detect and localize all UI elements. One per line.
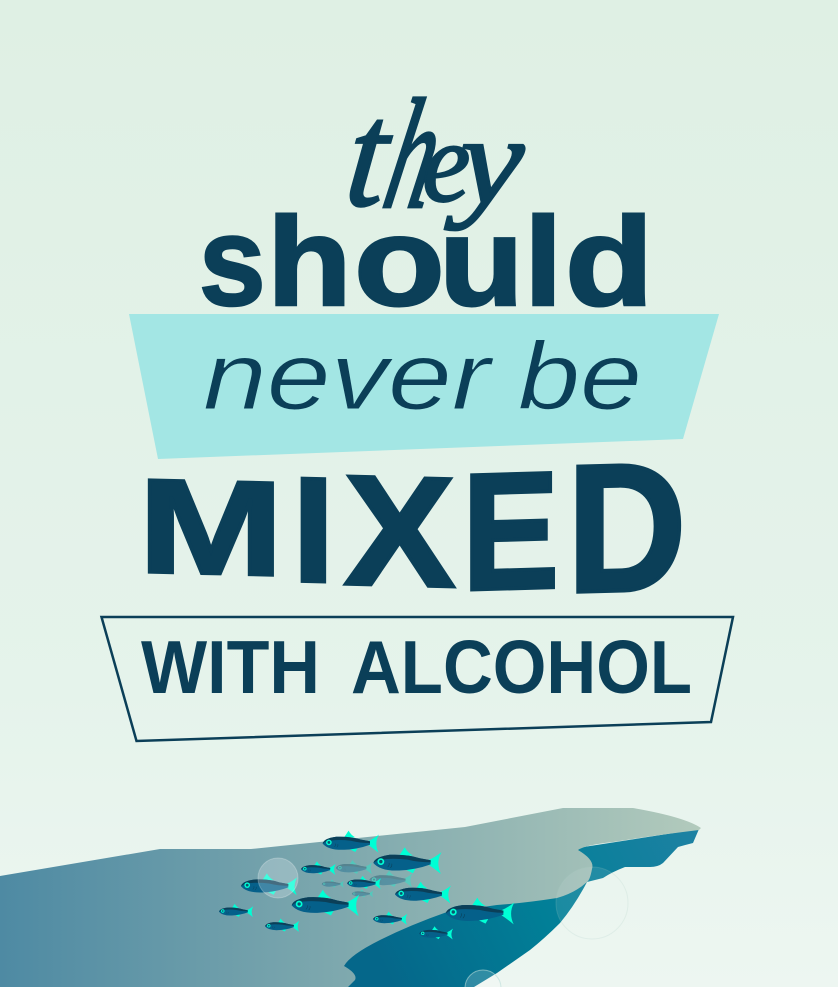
heading word: MIXED: X xyxy=(344,443,455,621)
fish school xyxy=(219,831,514,939)
text: ALCOHOL: ALCOHOL xyxy=(351,625,692,709)
bubble: bottom xyxy=(465,970,501,987)
heading word: should: d xyxy=(565,191,654,332)
heading word: should: o xyxy=(354,192,445,332)
heading word: should: s xyxy=(199,192,266,333)
heading word: MIXED: I xyxy=(292,446,335,615)
heading word: they: t xyxy=(339,72,399,238)
text: never: never xyxy=(203,323,495,430)
bubble: over fish xyxy=(258,858,298,898)
banner: never be xyxy=(129,314,719,459)
text: be: be xyxy=(518,323,642,430)
water: deep layer xyxy=(300,829,699,987)
heading word: MIXED xyxy=(138,425,686,631)
heading word: they: h xyxy=(372,68,456,242)
heading word: should: h xyxy=(267,192,352,333)
heading word: they: y xyxy=(444,91,528,231)
heading word: should: u xyxy=(439,192,524,333)
water: surface layer xyxy=(0,808,701,987)
heading word: MIXED: D xyxy=(567,425,686,631)
framed label: with alcohol xyxy=(102,617,733,741)
heading word: MIXED: M xyxy=(138,451,284,605)
heading word: should xyxy=(199,191,654,333)
heading word: should: l xyxy=(524,192,563,333)
heading word: MIXED: E xyxy=(462,437,559,626)
heading word: they: e xyxy=(422,99,470,227)
bubble: large faint xyxy=(556,867,628,939)
heading word: they xyxy=(339,68,528,242)
text: WITH: WITH xyxy=(141,625,320,709)
